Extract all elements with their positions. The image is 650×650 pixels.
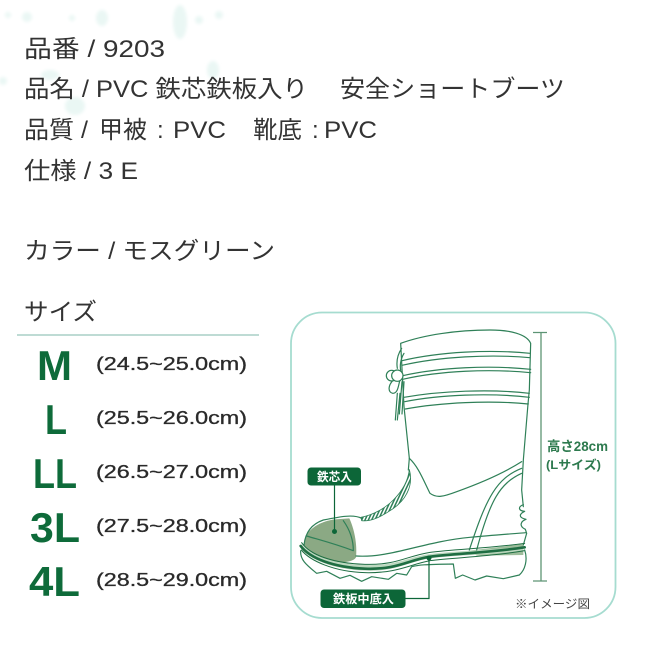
boot illustration [301,330,531,581]
size 3L: (27.5~28.0cm) [96,516,247,536]
material line: : [157,117,164,144]
material line: 靴底 [253,117,302,144]
image note: ※イメージ図 [515,597,590,611]
size M: M [37,342,72,389]
material line: PVC [173,117,226,144]
material line [24,117,377,144]
outsole tread [301,550,526,581]
size 3L [30,504,247,551]
midsole bands [301,543,525,573]
material line: 甲被 [99,117,147,144]
size LL: LL [33,450,77,497]
product name line [24,76,565,103]
size 4L: 4L [29,558,80,605]
callout: steel toe: 鉄芯入 [317,469,352,484]
callout: steel midsole: 鉄板中底入 [333,591,394,606]
size L: (25.5~26.0cm) [96,408,247,428]
drawstring and toggle [386,348,404,420]
size L [45,396,247,443]
instep hatching [361,469,411,521]
panel: boot diagram [291,312,616,618]
height dimension line [533,332,547,581]
callout: steel midsole [320,556,432,608]
height label [546,438,608,472]
cuff bands [402,351,531,409]
colour line: カラー / モスグリーン [24,238,275,265]
boot cuff and shaft [401,330,531,507]
size 4L [29,558,247,605]
size M [37,342,247,389]
callout: steel toe [308,468,361,534]
product number line: 品番 / 9203 [24,36,165,63]
size 3L: 3L [30,504,80,551]
heel pull ridges [519,505,527,545]
size LL: (26.5~27.0cm) [96,462,247,482]
toe cap shading [304,518,356,562]
product name line: 安全ショートブーツ [340,76,565,103]
size table [29,342,247,605]
toe outline [304,516,526,556]
material line: 品質 / [24,117,88,144]
size M: (24.5~25.0cm) [96,354,247,374]
size 4L: (28.5~29.0cm) [96,570,247,590]
sole shading [301,544,523,571]
size heading: サイズ [24,299,97,326]
specification line: 仕様 / 3 E [24,158,138,185]
material line: PVC [324,117,377,144]
height label: (Lサイズ) [546,457,601,472]
product name line: 品名 / PVC 鉄芯鉄板入り [24,76,308,103]
upper crease and heel stripe [409,458,522,550]
size LL [33,450,247,497]
material line: : [312,117,319,144]
size L: L [45,396,67,443]
heel wedge shading [470,544,523,556]
height label: 高さ28cm [547,438,608,454]
